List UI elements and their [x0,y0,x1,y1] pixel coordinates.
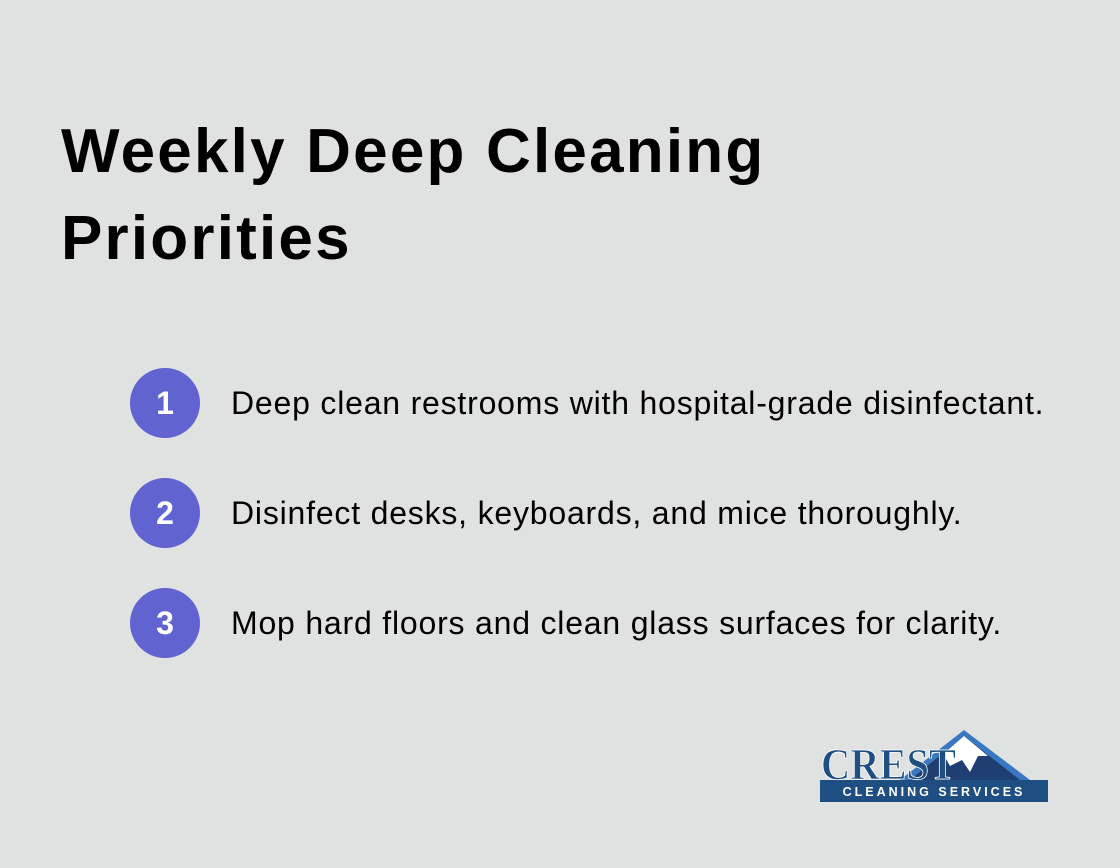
item 3 [130,588,1002,658]
item 2: Disinfect desks, keyboards, and mice thoroughly. [231,495,962,531]
logo: CLEANING SERVICES [843,785,1025,799]
item 3: Mop hard floors and clean glass surfaces for clarity. [231,605,1002,641]
item 1 [130,368,1044,438]
item 3: 3 [156,605,174,641]
logo [820,730,1048,802]
title [61,117,765,273]
item 1: Deep clean restrooms with hospital-grade disinfectant. [231,385,1044,421]
logo: CREST [821,740,956,789]
item 2: 2 [156,495,174,531]
title: Priorities [61,204,352,273]
item 1: 1 [156,385,174,421]
item 2 [130,478,962,548]
title: Weekly Deep Cleaning [61,117,765,186]
